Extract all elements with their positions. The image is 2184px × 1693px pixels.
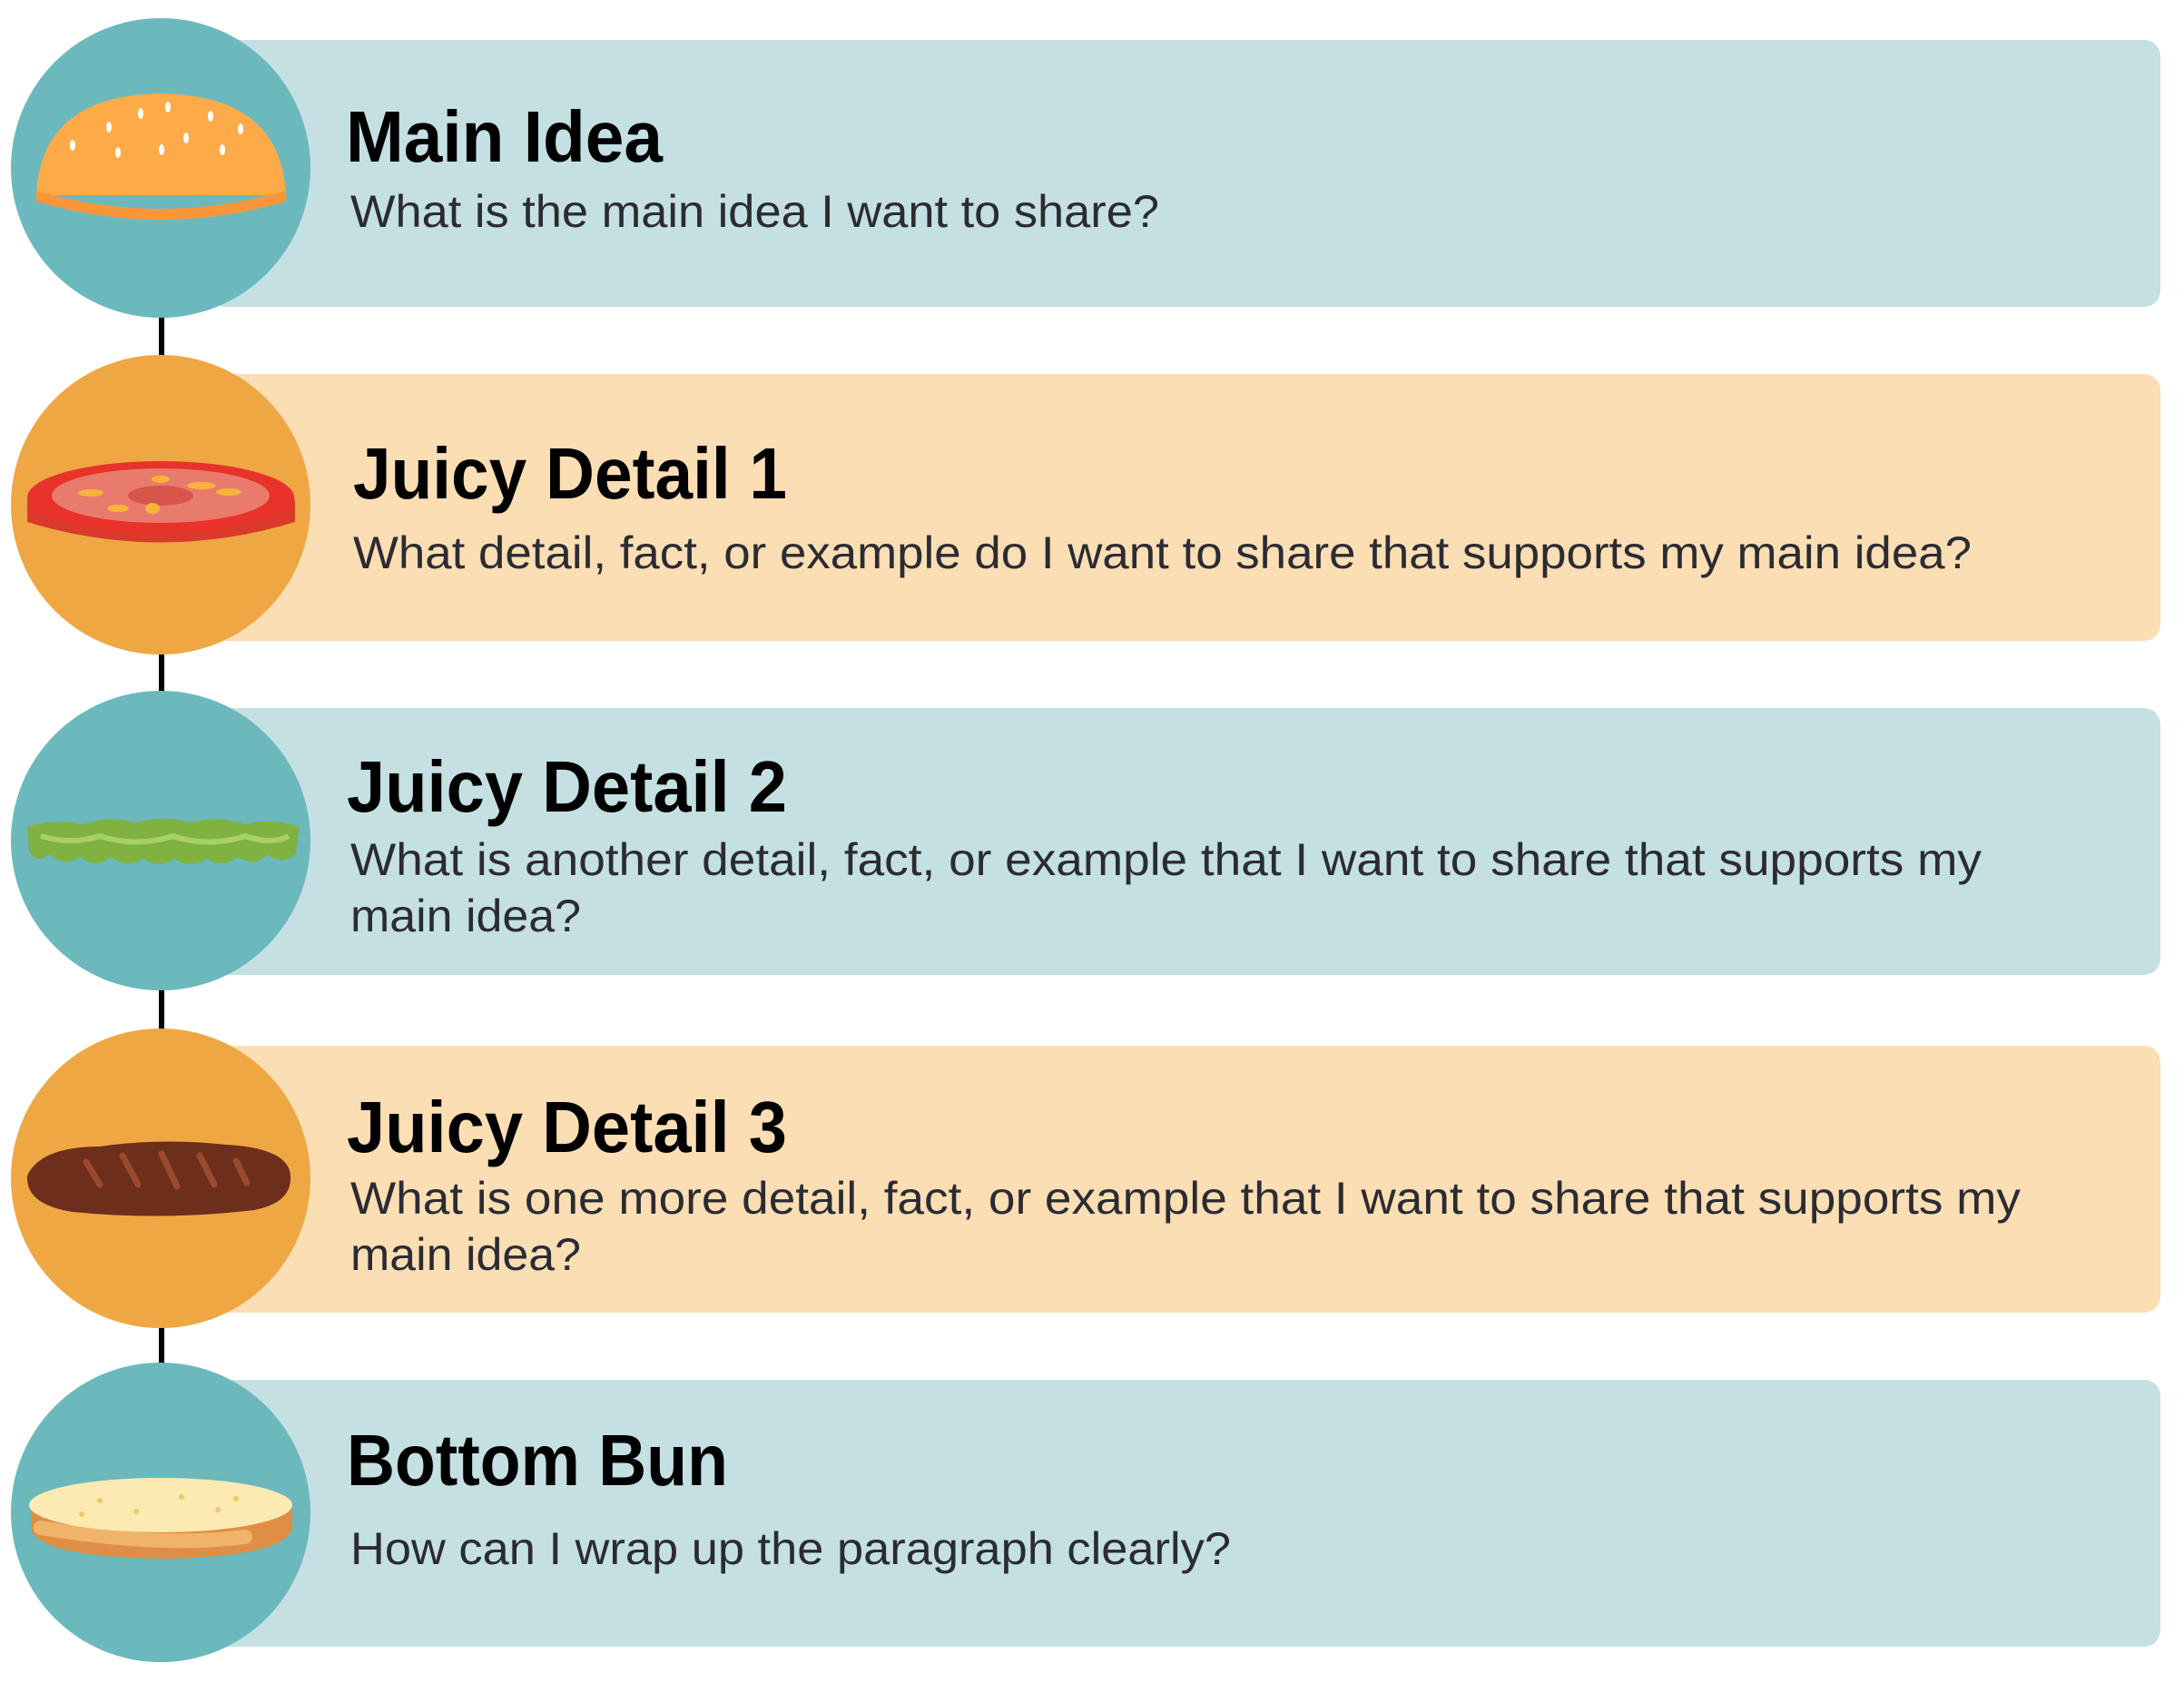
text: detail 2 question: main idea? bbox=[350, 891, 581, 941]
title: bottom bun: Bottom Bun bbox=[347, 1420, 728, 1501]
connector line bbox=[159, 309, 164, 1380]
title: juicy detail 2: Juicy Detail 2 bbox=[347, 746, 787, 827]
title: juicy detail 3: Juicy Detail 3 bbox=[347, 1087, 787, 1167]
icon: bottom bun circle bbox=[11, 1363, 310, 1662]
icon: lettuce circle bbox=[11, 691, 310, 990]
text: bottom bun question: How can I wrap up the paragraph clearly? bbox=[350, 1523, 1231, 1574]
text: detail 1 question: What detail, fact, or example do I want to share that supports my main idea? bbox=[353, 527, 1972, 578]
text: detail 2 question: What is another detail, fact, or example that I want to share that supports my bbox=[350, 834, 1982, 885]
text: detail 3 question: What is one more detail, fact, or example that I want to share that supports my bbox=[350, 1173, 2021, 1224]
title: juicy detail 1: Juicy Detail 1 bbox=[353, 433, 787, 514]
icon: tomato circle bbox=[11, 355, 310, 655]
panel: juicy detail 1 bbox=[11, 355, 2160, 655]
panel: juicy detail 2 bbox=[11, 691, 2160, 990]
title: main idea: Main Idea bbox=[346, 96, 663, 177]
panel: juicy detail 3 bbox=[11, 1029, 2160, 1328]
text: detail 3 question: main idea? bbox=[350, 1229, 581, 1280]
text: detail 2 question bbox=[350, 834, 1982, 941]
panel: main idea bbox=[11, 18, 2160, 318]
text: detail 3 question bbox=[350, 1173, 2021, 1280]
icon: top bun circle bbox=[11, 18, 310, 318]
icon: patty circle bbox=[11, 1029, 310, 1328]
panel: bottom bun bbox=[11, 1363, 2160, 1662]
text: main idea question: What is the main idea I want to share? bbox=[350, 186, 1159, 237]
